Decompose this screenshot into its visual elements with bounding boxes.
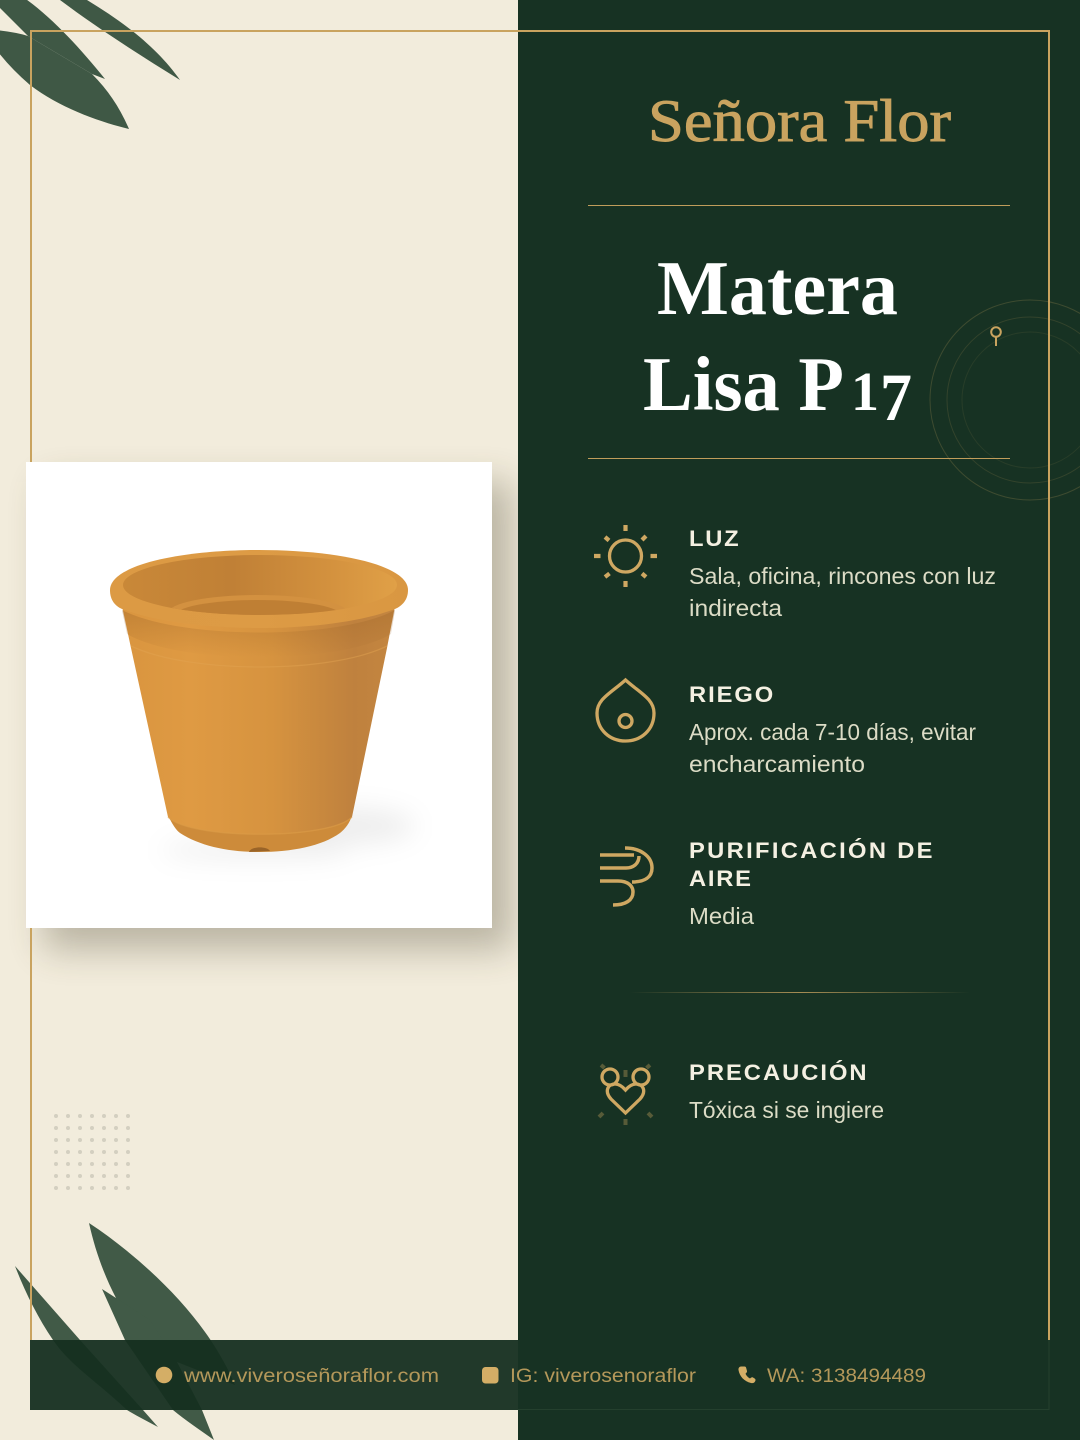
small pin ornament [991, 327, 1001, 346]
product title: Lisa P [643, 341, 844, 427]
product image shadow [44, 482, 512, 950]
icon: heart with rings [599, 1065, 652, 1125]
terracotta pot [110, 550, 408, 852]
product title: 7 [880, 359, 912, 435]
section: watering: Aprox. cada 7-10 días, evitar [689, 719, 976, 745]
section: light: Sala, oficina, rincones con luz [689, 563, 996, 589]
section: light: LUZ [689, 526, 740, 551]
footer instagram: IG: viverosenoraflor [510, 1366, 697, 1387]
section: watering: encharcamiento [689, 751, 865, 777]
top-left leaves [0, 0, 180, 129]
section: light: indirecta [689, 595, 782, 621]
section: caution [689, 1060, 884, 1123]
decorative concentric circles [930, 300, 1080, 500]
icon: water drop [597, 680, 654, 741]
footer bar [30, 1340, 1049, 1410]
section: watering: RIEGO [689, 682, 775, 707]
rule under title [588, 458, 1010, 459]
section: watering [689, 682, 976, 777]
icon: wind [600, 848, 652, 905]
right dark panel [518, 0, 1080, 1440]
section: light [689, 526, 996, 621]
rule under brand [588, 205, 1010, 206]
product title [643, 245, 912, 435]
section: air purification: AIRE [689, 866, 753, 891]
brand name: Señora Flor [648, 88, 951, 154]
section: air purification: Media [689, 903, 754, 929]
section: caution: Tóxica si se ingiere [689, 1097, 884, 1123]
product title: Matera [657, 245, 898, 331]
icon: sun [594, 525, 657, 587]
left cream background [0, 0, 518, 1440]
bottom-left leaves [15, 1223, 235, 1440]
pot floor shadow [160, 808, 415, 858]
product title: 1 [851, 361, 879, 422]
decorative dot grid [50, 1110, 134, 1194]
footer website: www.viveroseñoraflor.com [183, 1366, 439, 1387]
footer whatsapp: WA: 3138494489 [767, 1366, 926, 1387]
section: caution: PRECAUCIÓN [689, 1060, 869, 1085]
product photo card [26, 462, 492, 928]
section: air purification: PURIFICACIÓN DE [689, 838, 935, 863]
section: air purification [689, 838, 935, 929]
section divider [630, 992, 970, 993]
